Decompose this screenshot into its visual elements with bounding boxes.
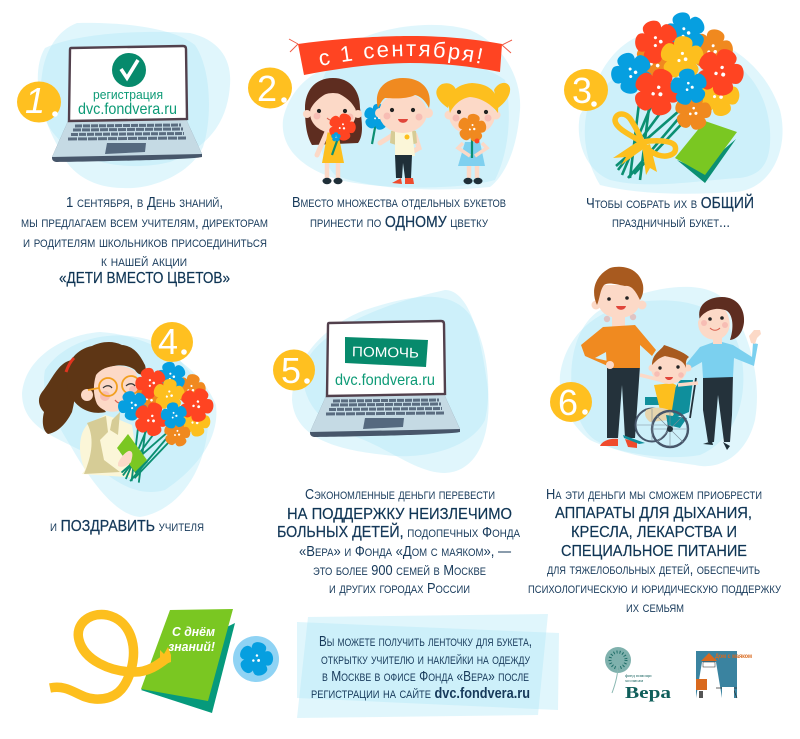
background blobs 1 — [38, 23, 230, 188]
background blobs 4 — [22, 332, 216, 517]
text block 5: и других городах России — [329, 580, 470, 597]
text block 5 — [277, 486, 521, 597]
text block 6: На эти деньги мы сможем приобрести — [546, 486, 762, 503]
panel 5: donate — [273, 290, 521, 597]
icon: laptop with registration screen — [52, 46, 202, 162]
panel 2: children — [248, 25, 520, 231]
text block 6: их семьям — [626, 599, 684, 616]
badge: step 3 — [564, 69, 608, 111]
callout: ribbon pickup info: в Москве в офисе Фонда «Вера» после — [322, 668, 529, 685]
woman figure — [686, 297, 761, 450]
badge: step 6 — [550, 382, 592, 423]
badge: step 4 — [151, 321, 193, 362]
background blobs 3 — [579, 31, 783, 194]
icon: laptop with registration screen: dvc.fondvera.ru — [78, 101, 177, 118]
text block 3 — [586, 193, 754, 231]
badge: step 5: 5 — [281, 350, 301, 391]
man figure — [581, 267, 656, 448]
text block 6: КРЕСЛА, ЛЕКАРСТВА И — [571, 524, 737, 541]
icon: laptop with registration screen: регистрация — [93, 87, 163, 102]
badge: step 2: 2 — [257, 68, 277, 109]
child in wheelchair — [623, 345, 698, 447]
logo: Дом с маяком: Дом с маяком — [715, 654, 752, 660]
icon: laptop with donate screen: dvc.fondvera.ru — [335, 372, 435, 389]
bottom: card and ribbon — [50, 609, 279, 713]
callout: ribbon pickup info — [297, 614, 559, 718]
text block 5: НА ПОДДЕРЖКУ НЕИЗЛЕЧИМО — [287, 506, 512, 523]
text block 5: «Вера» и Фонда «Дом с маяком», — — [299, 543, 511, 560]
badge: step 4: 4 — [158, 321, 178, 362]
logo: Фонд Вера: Вера — [625, 683, 672, 702]
logo: Фонд Вера: хосписам — [625, 678, 643, 683]
text block 6: для тяжелобольных детей, обеспечить — [547, 561, 760, 578]
icon: yellow bow — [613, 114, 676, 175]
logo: Дом с маяком — [696, 651, 752, 698]
panel 1: registration — [17, 23, 268, 287]
icon: laptop with donate screen: ПОМОЧЬ — [352, 343, 419, 361]
text block 5: это более 900 семей в Москве — [313, 562, 486, 579]
callout: ribbon pickup info: регистрации на сайте dvc.fondvera.ru — [311, 685, 530, 702]
badge: step 6: 6 — [558, 382, 578, 423]
icon: laptop with donate screen — [310, 321, 460, 437]
icon: yellow ribbon — [50, 615, 171, 699]
banner: с 1 сентября — [288, 36, 512, 75]
text block 3: праздничный букет... — [612, 214, 730, 231]
logo: Фонд Вера: фонд помощи — [625, 673, 652, 678]
background blobs 5 — [292, 290, 489, 473]
logo: Фонд Вера — [605, 647, 672, 702]
badge: step 1: 1 — [25, 80, 45, 121]
icon: greeting card: знаний! — [168, 639, 216, 654]
teacher figure — [39, 342, 146, 478]
text block 5: БОЛЬНЫХ ДЕТЕЙ, подопечных Фонда — [277, 522, 521, 541]
text block 6: АППАРАТЫ ДЛЯ ДЫХАНИЯ, — [555, 505, 752, 522]
text block 1: «ДЕТИ ВМЕСТО ЦВЕТОВ» — [59, 270, 230, 287]
text block 4: и ПОЗДРАВИТЬ учителя — [50, 518, 204, 535]
badge: step 2 — [248, 68, 292, 109]
icon: flower bouquet — [603, 7, 753, 180]
panel 4: teacher — [22, 321, 220, 535]
background blobs 2 — [283, 25, 520, 189]
badge: step 1 — [17, 80, 61, 122]
banner: с 1 сентября: с 1 сентября! — [320, 42, 482, 66]
text block 5: Сэкономленные деньги перевести — [305, 486, 495, 503]
icon: card and hand — [117, 434, 148, 474]
girl with red flower — [303, 78, 362, 184]
icon: green card — [675, 121, 737, 183]
text block 2: принести по ОДНОМУ цветку — [310, 214, 489, 231]
icon: greeting card — [141, 609, 235, 713]
text block 2 — [292, 194, 506, 231]
panel 6: family — [528, 267, 782, 616]
icon: greeting card: С днём — [172, 624, 215, 639]
text block 1: 1 сентября, в День знаний, — [66, 194, 223, 211]
text block 1 — [21, 194, 268, 287]
panel 3: bouquet — [564, 7, 783, 231]
text block 6 — [528, 486, 782, 616]
boy with blue flower — [360, 78, 433, 184]
badge: step 5 — [273, 350, 315, 391]
text block 1: мы предлагаем всем учителям, директорам — [21, 214, 268, 231]
badge: step 3: 3 — [572, 70, 592, 111]
text block 2: Вместо множества отдельных букетов — [292, 194, 506, 211]
text block 1: к нашей акции — [101, 253, 187, 270]
background blobs 6 — [560, 287, 757, 466]
text block 6: СПЕЦИАЛЬНОЕ ПИТАНИЕ — [561, 543, 747, 560]
callout: ribbon pickup info: Вы можете получить ленточку для букета, — [319, 633, 532, 650]
text block 3: Чтобы собрать их в ОБЩИЙ — [586, 193, 754, 212]
girl with orange flower — [436, 83, 510, 184]
icon: blue flower circle — [233, 636, 279, 682]
icon: bouquet held by teacher — [112, 358, 220, 483]
callout: ribbon pickup info: открытку учителю и наклейки на одежду — [321, 651, 531, 668]
text block 1: и родителям школьников присоединиться — [23, 234, 267, 251]
